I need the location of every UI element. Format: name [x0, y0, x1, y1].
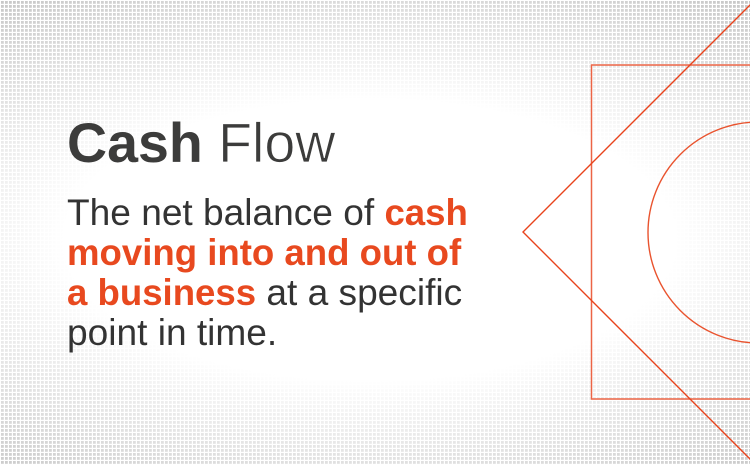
square outline — [592, 65, 750, 399]
definition text: moving into and out of — [67, 232, 461, 273]
definition text: point in time. — [67, 311, 277, 353]
circle outline — [648, 122, 750, 343]
definition text: The net balance of cash — [67, 191, 468, 233]
diamond outline — [523, 0, 750, 464]
definition text — [67, 191, 468, 353]
title: Cash Flow — [67, 112, 335, 174]
definition text: a business at a specific — [67, 271, 462, 313]
